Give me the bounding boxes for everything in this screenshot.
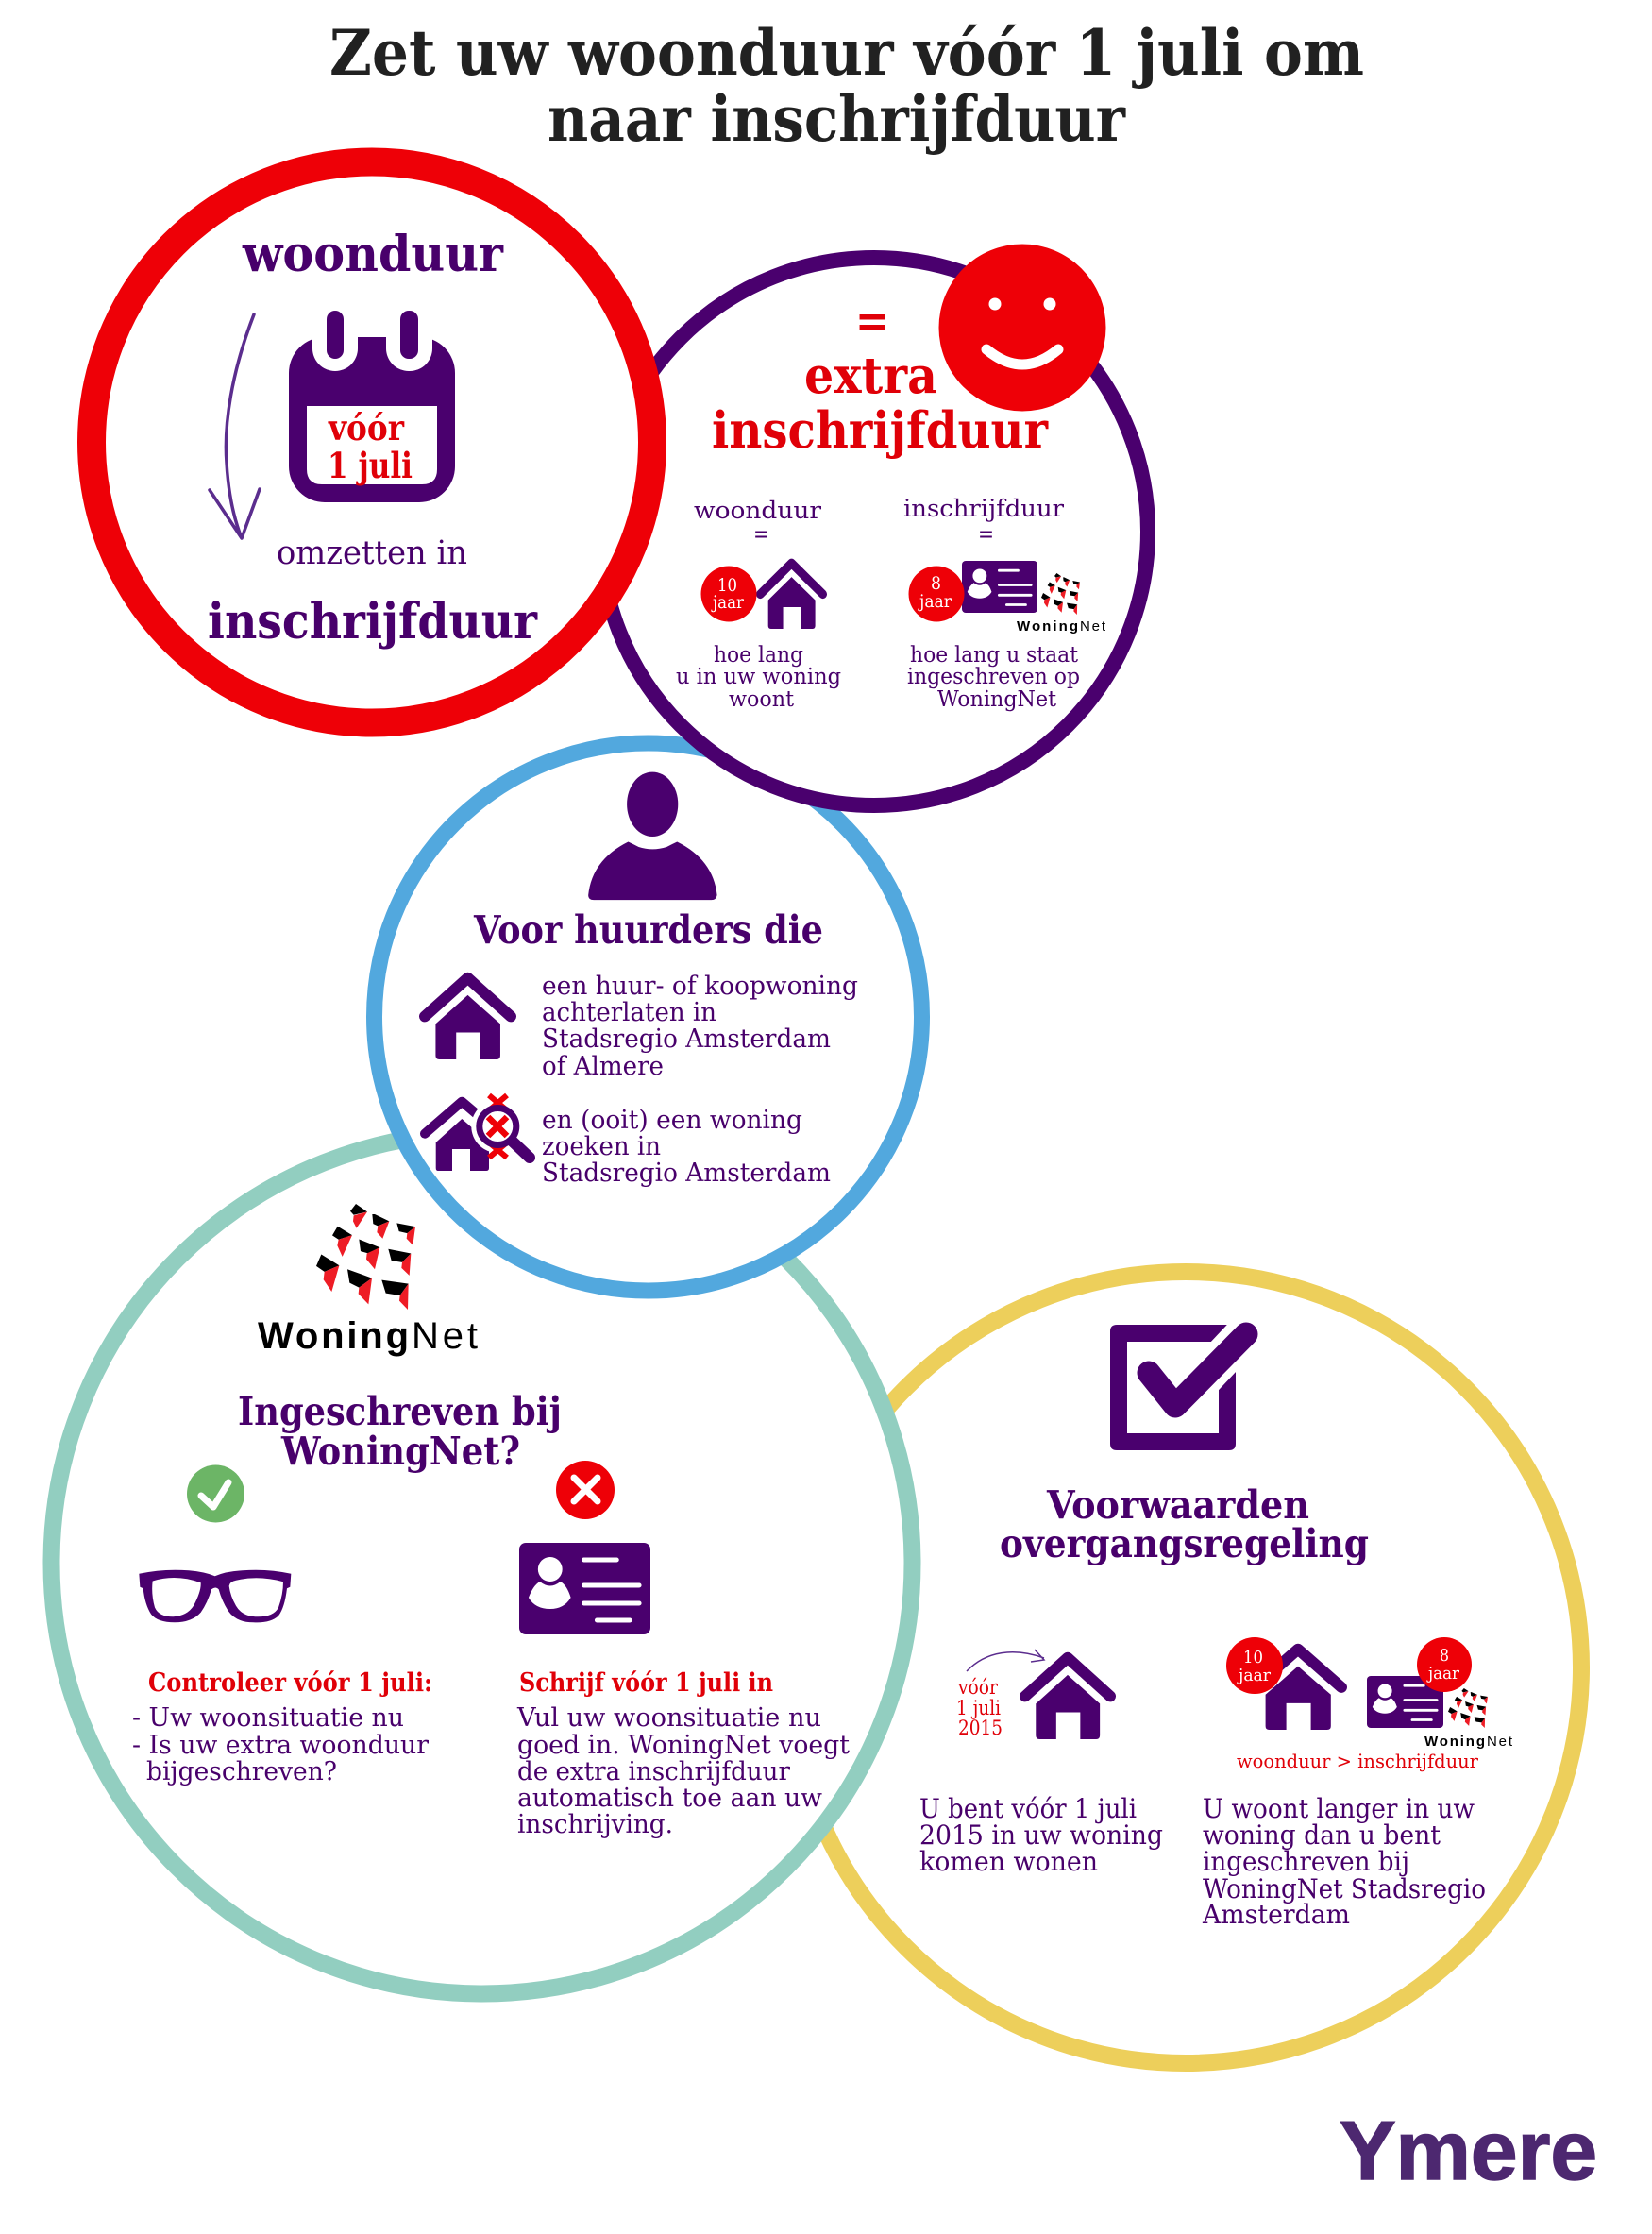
title: Zet uw woonduur vóór 1 juli om — [329, 16, 1364, 90]
text: hoe lang u staat ingeschreven op WoningNet: hoe lang u staat — [910, 643, 1079, 668]
label: inschrijfduur = — [903, 495, 1064, 548]
icon: card with WoningNet logo and 8 jaar badge: 8 — [931, 573, 941, 594]
text: hoe lang u in uw woning woont: u in uw woning — [676, 665, 841, 689]
text: schrijf voor 1 juli in — [516, 1668, 850, 1839]
icon: id card — [519, 1543, 650, 1634]
label: vóór 1 juli 2015: 2015 — [958, 1717, 1003, 1739]
icon: house with magnifier and crosses — [425, 1095, 530, 1171]
icon: card with WoningNet logo and 8 jaar badge: 8 — [1440, 1646, 1449, 1666]
icon: card with WoningNet logo and 8 jaar badge: jaar — [918, 591, 952, 612]
icon: red cross — [556, 1461, 615, 1519]
text: voor 1 juli 2015 komen wonen: U bent vóór 1 juli — [919, 1793, 1137, 1824]
text: schrijf voor 1 juli in: automatisch toe aan uw — [517, 1784, 822, 1813]
icon: house with 10 jaar badge: jaar — [1237, 1666, 1271, 1685]
icon: person — [588, 772, 717, 900]
heading: voor huurders die: Voor huurders die — [473, 907, 823, 953]
icon: card with WoningNet logo and 8 jaar badge: jaar — [1426, 1664, 1459, 1684]
heading: voorwaarden overgangsregeling: overgangsregeling — [1000, 1521, 1369, 1566]
text: hoe lang u staat ingeschreven op WoningNet: WoningNet — [937, 687, 1057, 712]
text: woning achterlaten — [542, 972, 858, 1081]
text: hoe lang u in uw woning woont: hoe lang — [714, 643, 803, 668]
label: woonduur groter dan inschrijfduur: woonduur > inschrijfduur — [1237, 1750, 1478, 1772]
heading: ingeschreven bij WoningNet?: Ingeschreven bij — [238, 1389, 562, 1434]
heading: ingeschreven bij WoningNet? — [238, 1389, 562, 1474]
label: woonduur = — [694, 497, 821, 548]
text: controleer voor 1 juli: bijgeschreven? — [146, 1757, 337, 1786]
text: voor 1 juli 2015 komen wonen: komen wonen — [919, 1846, 1098, 1877]
text: omzetten in: omzetten in — [277, 534, 467, 572]
label: vóór 1 juli 2015: 1 juli — [956, 1697, 1001, 1719]
heading: ingeschreven bij WoningNet?: WoningNet? — [280, 1429, 520, 1474]
text: controleer voor 1 juli — [132, 1668, 432, 1786]
text: hoe lang u staat ingeschreven op WoningNet: ingeschreven op — [907, 665, 1080, 689]
text: schrijf voor 1 juli in: de extra inschrijfduur — [517, 1757, 790, 1786]
text: u woont langer: Amsterdam — [1202, 1899, 1350, 1930]
text: u woont langer: woning dan u bent — [1203, 1819, 1441, 1851]
text: u woont langer: U woont langer in uw — [1203, 1793, 1475, 1824]
icon: green check — [187, 1465, 244, 1522]
text: schrijf voor 1 juli in: Schrijf vóór 1 juli in — [519, 1668, 773, 1698]
logo: Ymere: Ymere — [1340, 2104, 1597, 2197]
panel: voorwaarden overgangsregeling — [790, 1272, 1581, 2063]
panel: woonduur omzetten in inschrijfduur — [92, 162, 652, 723]
text: woning achterlaten: achterlaten in — [542, 998, 716, 1027]
icon: card with WoningNet logo and 8 jaar badge: Woning — [1017, 618, 1078, 635]
text: woning achterlaten: een huur- of koopwoning — [542, 972, 858, 1001]
label: inschrijfduur =: inschrijfduur — [903, 495, 1064, 522]
text: woning zoeken: en (ooit) een woning — [542, 1106, 802, 1135]
text: schrijf voor 1 juli in: Vul uw woonsituatie nu — [516, 1703, 821, 1733]
arrow: woonduur to inschrijfduur — [210, 314, 260, 538]
text: schrijf voor 1 juli in: inschrijving. — [517, 1810, 673, 1839]
heading: woonduur: woonduur — [242, 226, 504, 283]
text: hoe lang u in uw woning woont — [676, 643, 841, 712]
icon: house with 10 jaar badge — [700, 563, 823, 629]
label: woonduur =: woonduur — [694, 497, 821, 524]
icon: calendar: 1 juli — [328, 445, 413, 486]
title — [329, 16, 1364, 156]
logo: WoningNet: Woning — [258, 1315, 409, 1357]
icon: card with WoningNet logo and 8 jaar badge — [1367, 1637, 1513, 1750]
logo: WoningNet — [258, 1204, 478, 1357]
title: naar inschrijfduur — [548, 82, 1126, 156]
panel: voor huurders die — [374, 743, 921, 1291]
heading: inschrijfduur: inschrijfduur — [208, 593, 538, 651]
label: woonduur =: = — [753, 520, 769, 548]
icon: card with WoningNet logo and 8 jaar badge: Net — [1080, 618, 1106, 635]
text: controleer voor 1 juli: - Uw woonsituatie nu — [132, 1703, 404, 1733]
icon: glasses — [139, 1570, 291, 1622]
text: woning achterlaten: Stadsregio Amsterdam — [542, 1024, 831, 1054]
logo: WoningNet: Net — [412, 1315, 478, 1357]
text: u woont langer — [1202, 1793, 1486, 1930]
heading: = extra inschrijfduur: inschrijfduur — [712, 401, 1049, 460]
text: woning achterlaten: of Almere — [542, 1052, 664, 1081]
text: controleer voor 1 juli: Controleer vóór 1 juli: — [148, 1668, 432, 1698]
text: u woont langer: WoningNet Stadsregio — [1203, 1873, 1486, 1904]
heading: = extra inschrijfduur — [712, 293, 1049, 460]
heading: = extra inschrijfduur: extra — [804, 347, 937, 405]
heading: = extra inschrijfduur: = — [855, 293, 889, 348]
label: inschrijfduur =: = — [978, 520, 994, 548]
text: hoe lang u in uw woning woont: woont — [729, 687, 795, 712]
panel: ingeschreven bij WoningNet — [51, 1133, 912, 1994]
icon: card with WoningNet logo and 8 jaar badge — [908, 561, 1106, 635]
text: u woont langer: ingeschreven bij — [1203, 1846, 1409, 1877]
panel: extra inschrijfduur — [600, 244, 1148, 805]
text: voor 1 juli 2015 komen wonen: 2015 in uw woning — [919, 1819, 1163, 1851]
icon: calendar: vóór — [328, 407, 404, 448]
icon: house with 10 jaar badge: jaar — [711, 592, 745, 613]
label: vóór 1 juli 2015 — [956, 1676, 1003, 1739]
icon: house with 10 jaar badge — [1226, 1637, 1341, 1730]
icon: smiley — [938, 244, 1106, 412]
icon: calendar — [289, 302, 455, 502]
icon: card with WoningNet logo and 8 jaar badge: Net — [1487, 1734, 1513, 1750]
text: woning zoeken: Stadsregio Amsterdam — [542, 1159, 831, 1188]
text: woning zoeken — [542, 1106, 831, 1188]
icon: house with 10 jaar badge: 10 — [1243, 1648, 1263, 1667]
icon: checkbox — [1110, 1325, 1254, 1450]
label: vóór 1 juli 2015: vóór — [957, 1676, 999, 1699]
icon: card with WoningNet logo and 8 jaar badge: Woning — [1424, 1734, 1485, 1750]
arrow: curved into house — [967, 1650, 1044, 1671]
text: woning zoeken: zoeken in — [542, 1132, 661, 1161]
text: schrijf voor 1 juli in: goed in. WoningNet voegt — [517, 1731, 850, 1760]
icon: house — [425, 978, 511, 1059]
icon: house — [1025, 1658, 1110, 1739]
text: voor 1 juli 2015 komen wonen — [919, 1793, 1163, 1877]
text: hoe lang u staat ingeschreven op WoningNet — [907, 643, 1080, 712]
text: controleer voor 1 juli: - Is uw extra woonduur — [132, 1731, 429, 1760]
heading: voorwaarden overgangsregeling — [1000, 1482, 1369, 1566]
heading: voorwaarden overgangsregeling: Voorwaarden — [1046, 1482, 1309, 1528]
icon: house with 10 jaar badge: 10 — [717, 575, 737, 596]
